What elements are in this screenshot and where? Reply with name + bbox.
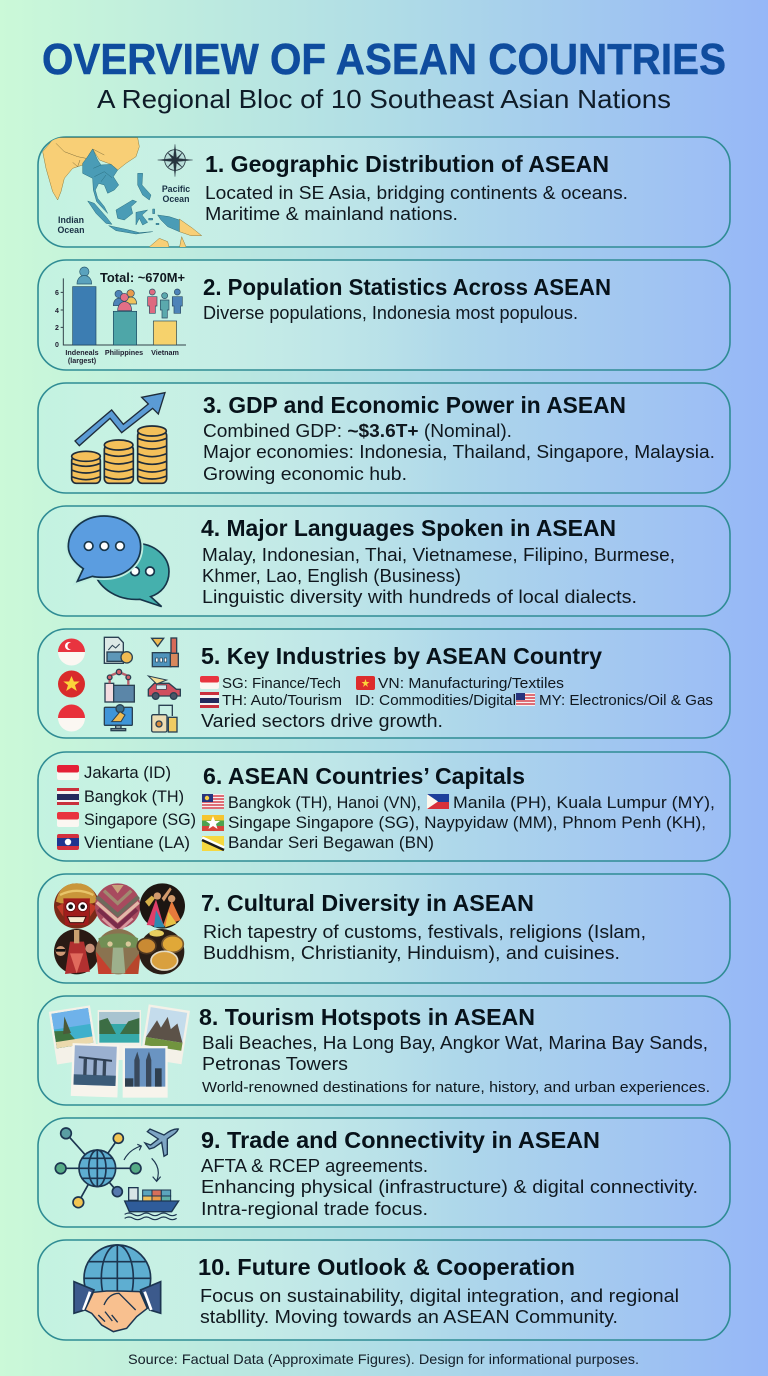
body text with inline flags: ID: Commodities/Digital bbox=[355, 692, 516, 709]
compass bbox=[158, 144, 193, 177]
capitals list with flags: Bangkok (TH) bbox=[84, 787, 184, 806]
ceremony figures photo bbox=[54, 929, 99, 974]
body text with inline flags: MY: Electronics/Oil & Gas bbox=[539, 692, 713, 709]
chart category labels: Philippines bbox=[105, 348, 143, 357]
mask photo bbox=[54, 883, 99, 929]
map labels: Indian bbox=[58, 215, 84, 225]
finance icon bbox=[104, 637, 132, 663]
body text: Buddhism, Christianity, Hinduism), and cuisines. bbox=[203, 942, 620, 963]
round flags bbox=[58, 638, 85, 732]
heading: 7. Cultural Diversity in ASEAN bbox=[201, 890, 534, 916]
three people icon bbox=[148, 289, 182, 318]
source footer: Source: Factual Data (Approximate Figures). Design for informational purposes. bbox=[128, 1351, 639, 1367]
robotics icon bbox=[105, 669, 134, 702]
body text bbox=[203, 921, 646, 963]
capitals body text with flags: Bandar Seri Begawan (BN) bbox=[228, 833, 434, 852]
capitals body text with flags: Manila (PH), Kuala Lumpur (MY), bbox=[453, 793, 715, 812]
chart axis numbers: 4 bbox=[55, 308, 59, 315]
panel 3: gdp bbox=[38, 383, 730, 493]
digital icon bbox=[104, 705, 132, 731]
heading: 1. Geographic Distribution of ASEAN bbox=[205, 151, 609, 177]
map labels: Ocean bbox=[58, 225, 84, 235]
body text bbox=[200, 1285, 679, 1327]
body text: Intra-regional trade focus. bbox=[201, 1198, 428, 1219]
oil and gas icon bbox=[152, 705, 177, 732]
people group icon bbox=[113, 290, 137, 311]
panel 5: industries bbox=[38, 629, 730, 738]
photo: petronas towers bbox=[123, 1046, 168, 1098]
icon: connected globe, plane and ship bbox=[55, 1128, 179, 1220]
map labels bbox=[58, 184, 190, 235]
body text: Maritime & mainland nations. bbox=[205, 203, 458, 224]
chart category labels bbox=[65, 348, 179, 365]
capitals body text with flags bbox=[202, 793, 715, 852]
heading: 6. ASEAN Countries’ Capitals bbox=[203, 763, 525, 789]
body text: Combined GDP: ~$3.6T+ (Nominal). bbox=[203, 420, 512, 441]
heading: 9. Trade and Connectivity in ASEAN bbox=[201, 1127, 600, 1153]
body text: AFTA & RCEP agreements. bbox=[201, 1155, 428, 1176]
heading: 2. Population Statistics Across ASEAN bbox=[203, 274, 611, 300]
capitals body text with flags: Bangkok (TH), Hanoi (VN), bbox=[228, 793, 421, 812]
capitals body text with flags: Singape Singapore (SG), Naypyidaw (MM), Phnom Penh (KH), bbox=[228, 813, 706, 832]
chart total label: Total: ~670M+ bbox=[100, 271, 185, 285]
body text bbox=[203, 420, 715, 484]
panel 10: future outlook bbox=[38, 1240, 730, 1340]
car icon bbox=[148, 676, 180, 699]
heading: 3. GDP and Economic Power in ASEAN bbox=[203, 392, 626, 418]
heading: 4. Major Languages Spoken in ASEAN bbox=[201, 515, 616, 541]
title: OVERVIEW OF ASEAN COUNTRIES bbox=[42, 36, 726, 84]
body text bbox=[205, 182, 628, 224]
capitals list with flags: Singapore (SG) bbox=[84, 810, 196, 829]
icon: speech bubbles bbox=[68, 516, 169, 607]
panel 7: culture bbox=[38, 874, 730, 983]
capitals list with flags bbox=[57, 763, 196, 852]
cuisine photo bbox=[137, 929, 184, 974]
panel 9: trade bbox=[38, 1118, 730, 1227]
photo collage: tourist destinations bbox=[49, 1004, 190, 1098]
body text bbox=[201, 1155, 698, 1219]
panel 2: population bbox=[38, 260, 730, 370]
chart category labels: Vietnam bbox=[151, 348, 179, 357]
dancers photo bbox=[140, 883, 185, 929]
festival crowd photo bbox=[96, 929, 141, 974]
chart axis numbers: 6 bbox=[55, 290, 59, 297]
map labels: Pacific bbox=[162, 184, 190, 194]
plane bbox=[145, 1129, 178, 1156]
heading: 10. Future Outlook & Cooperation bbox=[198, 1254, 575, 1280]
chart axis numbers: 0 bbox=[55, 342, 59, 349]
textile photo bbox=[95, 883, 140, 932]
body text: Located in SE Asia, bridging continents & oceans. bbox=[205, 182, 628, 203]
body text: Malay, Indonesian, Thai, Vietnamese, Filipino, Burmese, bbox=[202, 544, 675, 565]
capitals list with flags: Vientiane (LA) bbox=[84, 833, 190, 852]
chart axis numbers bbox=[55, 290, 59, 349]
chart category labels: Indeneals bbox=[65, 348, 99, 357]
photo: bali beach bbox=[49, 1005, 98, 1065]
body text: Growing economic hub. bbox=[203, 463, 407, 484]
icon: globe and handshake bbox=[74, 1245, 161, 1332]
icon: coins and rising arrow bbox=[72, 393, 167, 483]
subtitle: A Regional Bloc of 10 Southeast Asian Nations bbox=[97, 84, 671, 114]
body text: Focus on sustainability, digital integration, and regional bbox=[200, 1285, 679, 1306]
factory icon bbox=[152, 638, 178, 667]
photo: ha long bay bbox=[98, 1010, 141, 1060]
body text: World-renowned destinations for nature, history, and urban experiences. bbox=[202, 1079, 710, 1096]
body text: Rich tapestry of customs, festivals, religions (Islam, bbox=[203, 921, 646, 942]
panel 4: languages bbox=[38, 506, 730, 616]
icon: map of southeast asia bbox=[43, 138, 202, 248]
capitals list with flags: Jakarta (ID) bbox=[84, 763, 171, 782]
photo: angkor wat bbox=[140, 1004, 190, 1064]
panel 1: geographic distribution bbox=[38, 137, 730, 248]
body text with inline flags: SG: Finance/Tech bbox=[222, 675, 341, 692]
image collage: culture bbox=[54, 883, 185, 974]
body text: Enhancing physical (infrastructure) & digital connectivity. bbox=[201, 1176, 698, 1197]
body text: Khmer, Lao, English (Business) bbox=[202, 565, 461, 586]
person icon bbox=[77, 267, 92, 284]
body text with inline flags: Varied sectors drive growth. bbox=[201, 710, 443, 731]
map labels: Ocean bbox=[163, 194, 189, 204]
heading: 5. Key Industries by ASEAN Country bbox=[201, 643, 602, 669]
body text bbox=[202, 544, 675, 607]
industry icons bbox=[104, 637, 180, 732]
panel 8: tourism bbox=[38, 996, 730, 1105]
body text with inline flags: VN: Manufacturing/Textiles bbox=[378, 675, 564, 692]
body text with inline flags bbox=[200, 675, 713, 731]
cargo ship bbox=[125, 1188, 179, 1220]
chart axis numbers: 2 bbox=[55, 325, 59, 332]
heading: 8. Tourism Hotspots in ASEAN bbox=[199, 1004, 535, 1030]
body text: Major economies: Indonesia, Thailand, Singapore, Malaysia. bbox=[203, 441, 715, 462]
body text with inline flags: TH: Auto/Tourism bbox=[222, 692, 342, 709]
body text bbox=[202, 1032, 710, 1096]
body text: Diverse populations, Indonesia most populous. bbox=[203, 302, 578, 323]
body text: Linguistic diversity with hundreds of local dialects. bbox=[202, 586, 637, 607]
body text: Petronas Towers bbox=[202, 1053, 348, 1074]
body text: stabllity. Moving towards an ASEAN Community. bbox=[200, 1306, 618, 1327]
body text: Bali Beaches, Ha Long Bay, Angkor Wat, Marina Bay Sands, bbox=[202, 1032, 708, 1053]
chart category labels: (largest) bbox=[68, 356, 97, 365]
panel 6: capitals bbox=[38, 752, 730, 861]
photo: marina bay sands bbox=[71, 1043, 119, 1097]
arrows bbox=[124, 1144, 161, 1181]
bar chart: population bbox=[55, 267, 186, 365]
